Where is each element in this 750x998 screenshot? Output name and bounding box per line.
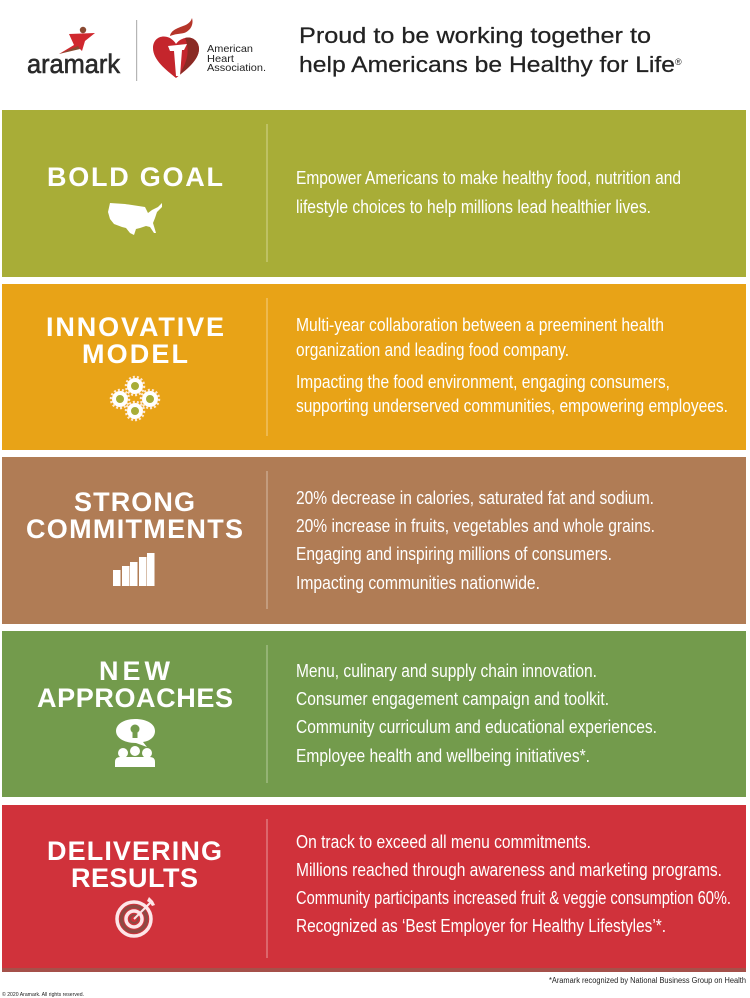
text: new approaches: Employee health and wellbeing initiatives*. — [296, 746, 590, 766]
text: bold goal — [296, 168, 681, 217]
heading: new approaches: NEW — [99, 656, 171, 686]
aramark logo — [27, 27, 120, 79]
heading: new approaches: APPROACHES — [37, 683, 233, 713]
American Heart Association logo — [153, 18, 266, 78]
text: strong commitments — [296, 488, 655, 593]
panel: strong commitments — [2, 457, 746, 624]
header tagline: Proud to be working together to — [299, 23, 651, 48]
heading: innovative model: INNOVATIVE — [46, 312, 224, 342]
text: innovative model: Multi-year collaboration between a preeminent health — [296, 315, 664, 335]
text: new approaches — [296, 661, 657, 766]
heading: delivering results — [47, 836, 222, 893]
text: innovative model — [296, 315, 728, 416]
aramark logo: aramark — [27, 49, 120, 79]
heading: strong commitments: STRONG — [74, 487, 195, 517]
heading: new approaches — [37, 656, 233, 713]
panel: bold goal — [2, 110, 746, 277]
icon: target — [117, 897, 155, 936]
American Heart Association logo: American — [207, 43, 253, 55]
text: delivering results: Recognized as ‘Best Employer for Healthy Lifestyles’*. — [296, 916, 666, 936]
text: bold goal: Empower Americans to make healthy food, nutrition and — [296, 168, 681, 188]
American Heart Association logo: Heart — [207, 53, 234, 65]
heading: strong commitments: COMMITMENTS — [26, 514, 243, 544]
text: strong commitments: Impacting communities nationwide. — [296, 573, 540, 593]
heading: innovative model: MODEL — [82, 339, 188, 369]
text: innovative model: Impacting the food environment, engaging consumers, — [296, 372, 670, 392]
text: strong commitments: Engaging and inspiring millions of consumers. — [296, 544, 612, 564]
text: new approaches: Community curriculum and educational experiences. — [296, 717, 657, 737]
icon: gears — [111, 377, 159, 420]
panel: innovative model — [2, 284, 746, 450]
text: strong commitments: 20% increase in fruits, vegetables and whole grains. — [296, 516, 655, 536]
header tagline: ® — [675, 57, 682, 67]
header tagline — [299, 23, 682, 77]
text: new approaches: Consumer engagement campaign and toolkit. — [296, 689, 609, 709]
header tagline: help Americans be Healthy for Life — [299, 52, 675, 77]
text: innovative model: organization and leading food company. — [296, 340, 569, 360]
panel: new approaches — [2, 631, 746, 797]
text: delivering results — [296, 832, 731, 936]
heading: strong commitments — [26, 487, 243, 544]
text: delivering results: On track to exceed all menu commitments. — [296, 832, 591, 852]
heading: delivering results: DELIVERING — [47, 836, 222, 866]
copyright: © 2020 Aramark. All rights reserved. — [2, 991, 84, 998]
text: strong commitments: 20% decrease in calories, saturated fat and sodium. — [296, 488, 654, 508]
icon: bar chart — [113, 553, 154, 586]
text: new approaches: Menu, culinary and supply chain innovation. — [296, 661, 597, 681]
heading: delivering results: RESULTS — [71, 863, 198, 893]
panel: delivering results — [2, 805, 746, 972]
text: bold goal: lifestyle choices to help millions lead healthier lives. — [296, 197, 651, 217]
heading: innovative model — [46, 312, 224, 369]
icon: people with lightbulb — [115, 719, 155, 767]
American Heart Association logo: Association. — [207, 62, 266, 74]
icon: USA map — [108, 203, 162, 235]
heading: bold goal: BOLD GOAL — [47, 162, 223, 192]
logo divider — [136, 20, 137, 81]
